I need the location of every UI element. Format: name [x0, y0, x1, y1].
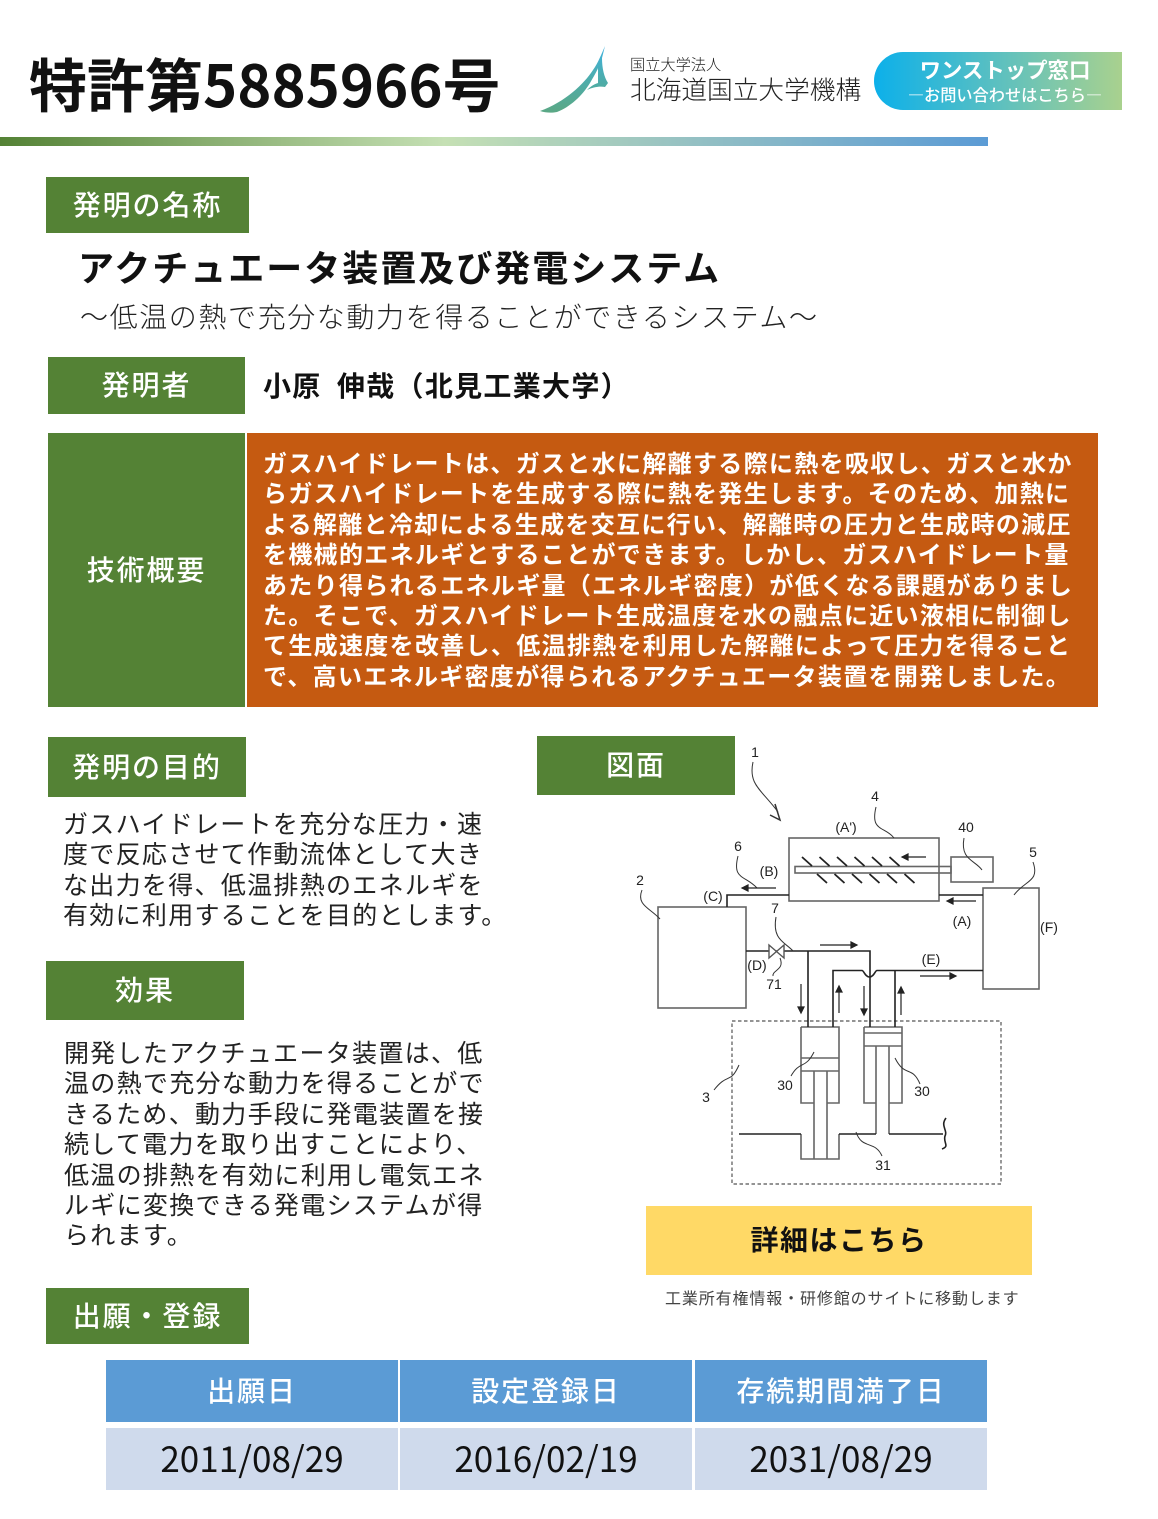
- title: patent number: 特許第5885966号: [29, 40, 501, 124]
- purpose text: 有効に利用することを目的とします。: [63, 896, 508, 932]
- purpose text: 度で反応させて作動流体として大き: [63, 835, 483, 871]
- panel: technology overview text: で、高いエネルギ密度が得られるアクチュエータ装置を開発しました。: [263, 657, 1071, 692]
- diagram: actuator device schematic: 31: [875, 1157, 891, 1173]
- column header: expiry date: 存続期間満了日: [736, 1370, 946, 1410]
- purpose text: な出力を得、低温排熱のエネルギを: [63, 866, 484, 902]
- panel: technology overview text: らガスハイドレートを生成する際に熱を発生します。そのため、加熱に: [263, 474, 1070, 509]
- heading: effect: 効果: [115, 969, 175, 1009]
- button: one-stop contact: ワンストップ窓口: [920, 54, 1090, 85]
- diagram: actuator device schematic: 40: [958, 819, 974, 835]
- diagram: actuator device schematic: 6: [734, 838, 742, 854]
- value: registration date: [400, 1428, 692, 1490]
- panel: technology overview text: あたり得られるエネルギ量（エネルギ密度）が低くなる課題がありまし: [263, 566, 1073, 601]
- column header: expiry date: [695, 1360, 987, 1422]
- logo text: organization name: [630, 53, 861, 107]
- panel: technology overview text: [247, 433, 1098, 707]
- effect text: られます。: [64, 1216, 193, 1252]
- diagram: actuator device schematic: 1: [751, 744, 759, 760]
- diagram: actuator device schematic: (F): [1040, 919, 1058, 935]
- diagram: actuator device schematic: (E): [922, 951, 940, 967]
- heading: figure: 図面: [606, 744, 666, 784]
- effect text: [64, 1034, 485, 1252]
- panel: technology overview text: を機械的エネルギとすることができます。しかし、ガスハイドレート量: [263, 535, 1070, 570]
- effect text: 温の熱で充分な動力を得ることがで: [64, 1064, 485, 1100]
- heading: purpose: [48, 737, 246, 797]
- icon: university logo mark: [540, 46, 608, 113]
- effect text: ルギに変換できる発電システムが得: [64, 1186, 484, 1222]
- heading: technology overview: [48, 433, 245, 707]
- value: filing date: [106, 1428, 398, 1490]
- table: dates: [106, 1360, 987, 1490]
- diagram: actuator device schematic: (B): [760, 863, 778, 879]
- heading: invention name: 発明の名称: [73, 184, 222, 224]
- heading: effect: [46, 961, 244, 1020]
- heading: invention name: [46, 177, 249, 233]
- panel: technology overview text: よる解離と冷却による生成を交互に行い、解離時の圧力と生成時の減圧: [263, 505, 1072, 540]
- diagram: actuator device schematic: 2: [636, 872, 644, 888]
- panel: technology overview text: て生成速度を改善し、低温排熱を利用した解離によって圧力を得ること: [263, 626, 1071, 661]
- purpose text: [63, 805, 508, 932]
- diagram: actuator device schematic: 5: [1029, 844, 1037, 860]
- diagram: actuator device schematic: 30: [914, 1083, 930, 1099]
- purpose text: ガスハイドレートを充分な圧力・速: [63, 805, 483, 841]
- effect text: 低温の排熱を有効に利用し電気エネ: [64, 1156, 485, 1192]
- panel: technology overview text: た。そこで、ガスハイドレート生成温度を水の融点に近い液相に制御し: [263, 596, 1072, 631]
- value: expiry date: 2031/08/29: [749, 1432, 933, 1482]
- invention title: アクチュエータ装置及び発電システム: [78, 240, 721, 292]
- diagram: actuator device schematic: (A'): [835, 819, 857, 835]
- value: filing date: 2011/08/29: [160, 1432, 344, 1482]
- button: details link: 詳細はこちら: [750, 1219, 928, 1259]
- value: registration date: 2016/02/19: [454, 1432, 638, 1482]
- effect text: きるため、動力手段に発電装置を接: [64, 1095, 484, 1131]
- heading: purpose: 発明の目的: [72, 746, 222, 786]
- heading: inventor: 発明者: [102, 364, 191, 404]
- column header: filing date: 出願日: [207, 1370, 297, 1410]
- inventor name: 小原 伸哉（北見工業大学）: [263, 365, 630, 405]
- button: one-stop contact: [874, 52, 1122, 110]
- column header: registration date: [400, 1360, 692, 1422]
- header gradient bar: [0, 137, 988, 146]
- diagram: actuator device schematic: (A): [953, 913, 971, 929]
- column header: filing date: [106, 1360, 398, 1422]
- value: expiry date: [695, 1428, 987, 1490]
- diagram: actuator device schematic: 3: [702, 1089, 710, 1105]
- column header: registration date: 設定登録日: [471, 1370, 621, 1410]
- note: link destination: 工業所有権情報・研修館のサイトに移動します: [665, 1285, 1019, 1309]
- heading: figure: [537, 736, 735, 795]
- heading: inventor: [48, 357, 245, 414]
- logo text: organization name: 国立大学法人: [630, 53, 721, 75]
- diagram: actuator device schematic: 7: [771, 900, 779, 916]
- diagram: actuator device schematic: 4: [871, 788, 879, 804]
- diagram: actuator device schematic: (C): [703, 888, 723, 904]
- effect text: 開発したアクチュエータ装置は、低: [64, 1034, 484, 1070]
- invention subtitle: ～低温の熱で充分な動力を得ることができるシステム～: [80, 296, 819, 336]
- button: details link: [646, 1206, 1032, 1275]
- panel: technology overview text: ガスハイドレートは、ガスと水に解離する際に熱を吸収し、ガスと水か: [263, 444, 1073, 479]
- heading: technology overview: 技術概要: [87, 548, 206, 588]
- button: one-stop contact: ―お問い合わせはこちら―: [908, 82, 1102, 106]
- logo text: organization name: 北海道国立大学機構: [630, 70, 861, 107]
- diagram: actuator device schematic: 30: [777, 1077, 793, 1093]
- diagram: actuator device schematic: 71: [766, 976, 782, 992]
- heading: application and registration: 出願・登録: [73, 1294, 222, 1334]
- heading: application and registration: [46, 1288, 249, 1344]
- effect text: 続して電力を取り出すことにより、: [64, 1125, 483, 1161]
- diagram: actuator device schematic: [636, 744, 1058, 1185]
- diagram: actuator device schematic: (D): [747, 957, 767, 973]
